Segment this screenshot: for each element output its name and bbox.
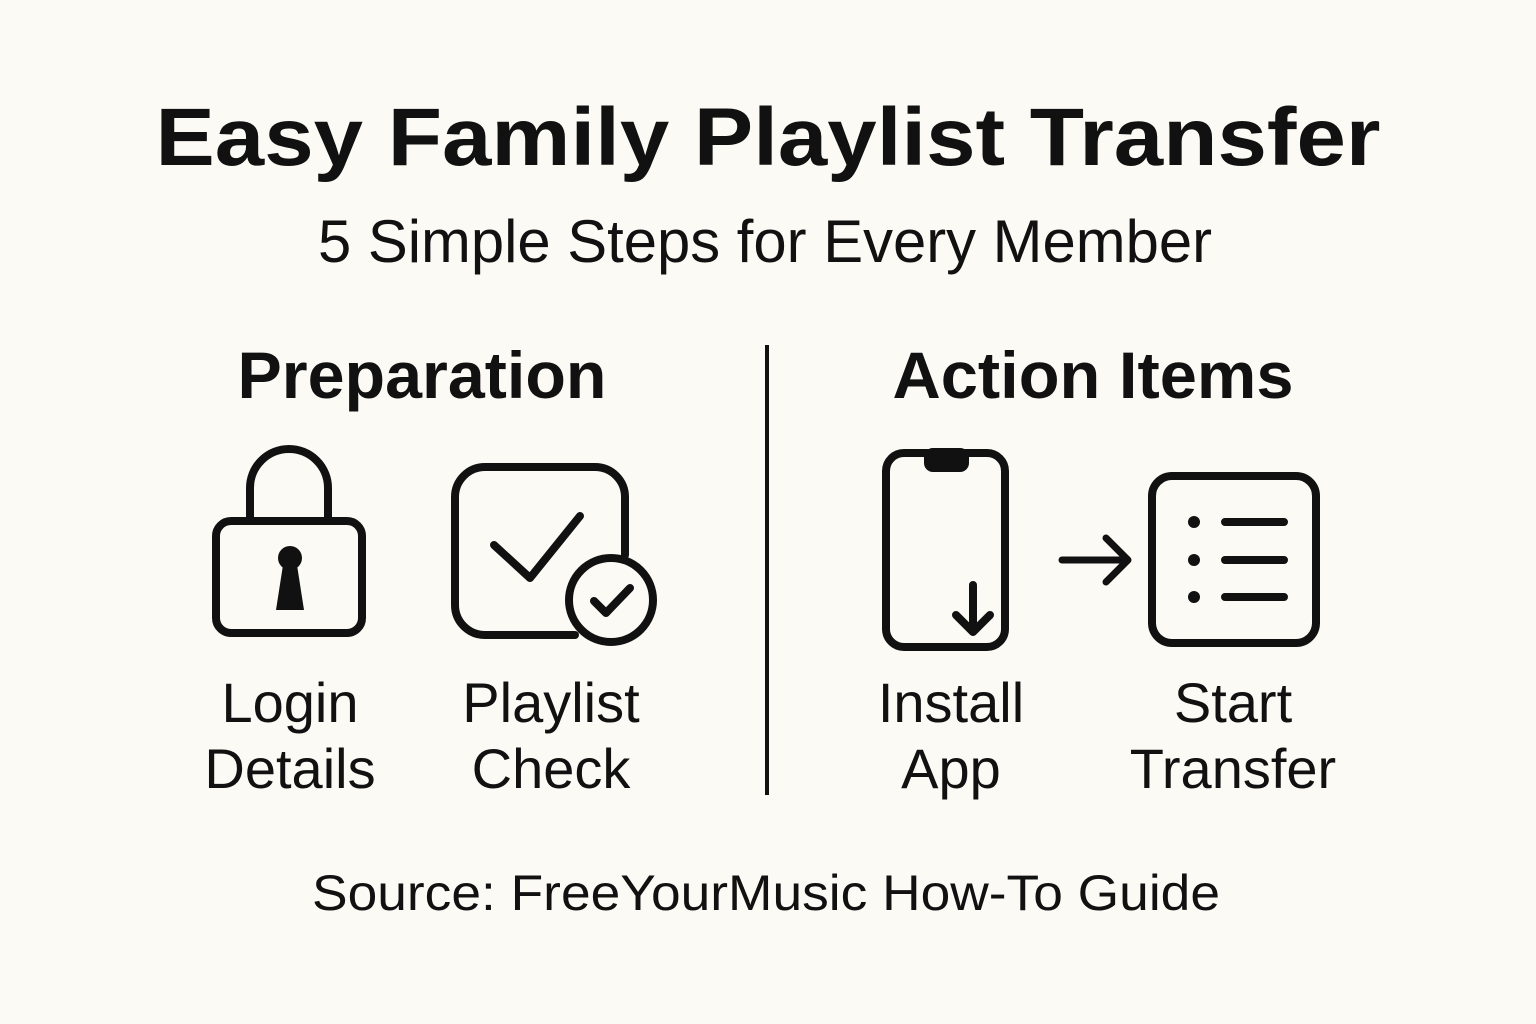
label: Install App: App (901, 737, 1001, 800)
label: Start Transfer (1130, 671, 1336, 800)
label: Playlist Check: Playlist (462, 671, 640, 734)
title: Easy Family Playlist Transfer (156, 92, 1380, 183)
label: Start Transfer: Transfer (1130, 737, 1336, 800)
icon: phone install (886, 452, 1005, 647)
heading: Action Items: Action Items (892, 338, 1294, 412)
icon: playlist check (455, 467, 653, 642)
label: Install App (878, 671, 1024, 800)
label: Start Transfer: Start (1174, 671, 1293, 734)
source: Source: FreeYourMusic How-To Guide (312, 865, 1220, 921)
heading: Preparation: Preparation (238, 338, 606, 412)
arrow (1062, 538, 1128, 582)
label: Login Details: Details (204, 737, 376, 800)
subtitle: 5 Simple Steps for Every Member (318, 208, 1212, 275)
label: Install App: Install (878, 671, 1024, 734)
label: Login Details: Login (221, 671, 359, 734)
label: Playlist Check: Check (472, 737, 631, 800)
icon: list (1152, 476, 1316, 643)
icon: lock (216, 449, 362, 633)
label: Playlist Check (462, 671, 640, 800)
label: Login Details (204, 671, 376, 800)
